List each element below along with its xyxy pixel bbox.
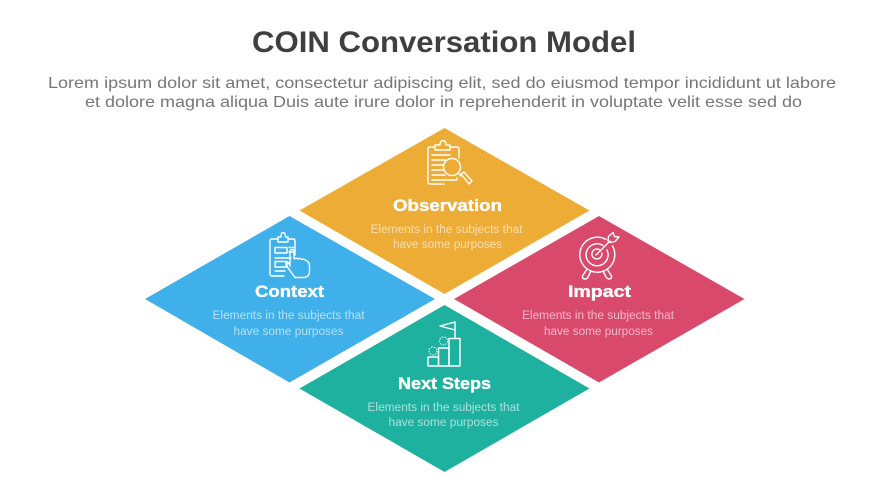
context diamond: [145, 216, 435, 382]
context description: Elements in the subjects that: [212, 310, 365, 322]
observation description: [370, 224, 523, 251]
panel: context: [145, 216, 435, 382]
next steps description: have some purposes: [388, 417, 499, 429]
panel: next steps: [300, 305, 590, 472]
panel: impact: [454, 216, 744, 382]
next steps description: [368, 402, 520, 429]
subtitle text: et dolore magna aliqua Duis aute irure dolor in reprehenderit in voluptate velit esse sed do: [85, 94, 802, 111]
observation description: have some purposes: [393, 239, 502, 251]
impact description: [522, 310, 675, 338]
title: COIN Conversation Model: [252, 26, 636, 59]
observation diamond: [300, 128, 590, 294]
panel: observation: [300, 128, 590, 294]
context description: [212, 310, 365, 338]
observation description: Elements in the subjects that: [370, 224, 523, 236]
impact description: have some purposes: [544, 326, 653, 338]
icon: clipboard with magnifier: [428, 140, 472, 184]
next steps description: Elements in the subjects that: [368, 402, 520, 414]
impact heading: Impact: [568, 283, 632, 301]
context description: have some purposes: [234, 326, 344, 338]
icon: bars with flag: [428, 322, 460, 366]
icon: clipboard with pointing hand: [270, 232, 310, 278]
impact description: Elements in the subjects that: [522, 310, 675, 322]
observation heading: Observation: [393, 197, 502, 215]
impact diamond: [454, 216, 744, 382]
next steps diamond: [300, 305, 590, 472]
subtitle text: Lorem ipsum dolor sit amet, consectetur adipiscing elit, sed do eiusmod tempor incididunt ut labore: [48, 75, 836, 92]
context heading: Context: [255, 283, 325, 301]
subtitle text: [48, 75, 836, 111]
next steps heading: Next Steps: [398, 375, 491, 393]
icon: target with arrow: [580, 232, 619, 279]
